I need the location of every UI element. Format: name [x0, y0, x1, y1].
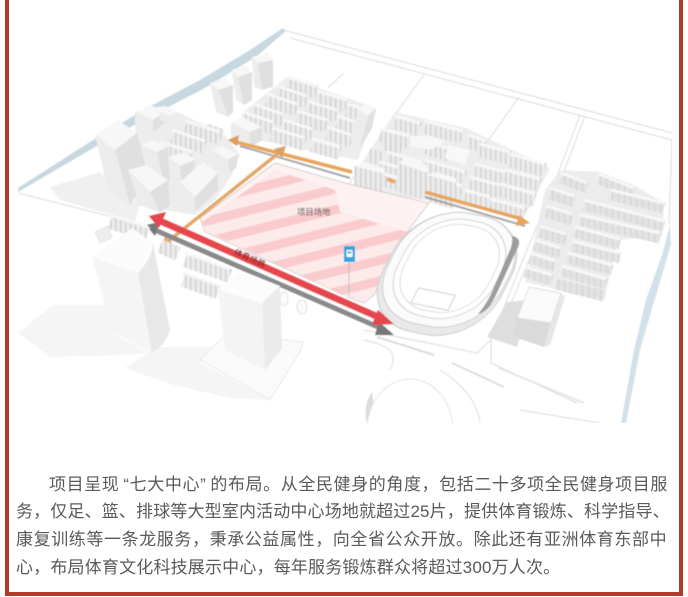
paragraph text: 务，仅足、篮、排球等大型室内活动中心场地就超过25片，提供体育锻炼、科学指导、	[16, 502, 670, 521]
rivers	[18, 28, 671, 423]
paragraph text: 康复训练等一条龙服务，秉承公益属性，向全省公众开放。除此还有亚洲体育东部中	[16, 530, 667, 549]
site hatching	[202, 170, 407, 301]
red road arrow	[149, 212, 394, 325]
site label: 项目场地	[297, 207, 331, 217]
paragraph text: 项目呈现“七大中心”的布局。从全民健身的角度，包括二十多项全民健身项目服	[49, 475, 668, 494]
building: upper left towers	[210, 53, 273, 117]
small low buildings near road	[95, 215, 307, 314]
grey road shadow arrow	[146, 222, 394, 335]
building: lower right block	[514, 287, 565, 347]
site illustration	[18, 28, 672, 423]
foreground curved tower	[92, 228, 170, 353]
site pale area	[200, 163, 429, 303]
project site	[200, 163, 429, 303]
residential block: upper left	[231, 77, 376, 160]
foreground plinth	[200, 333, 303, 400]
round building bottom	[368, 378, 454, 423]
bus stop sign	[344, 246, 355, 296]
building row: front of middle block	[354, 158, 456, 202]
stadium dark stand	[478, 236, 519, 314]
orange arrow: cross road	[161, 146, 286, 248]
stadium	[376, 211, 520, 336]
ground shadows	[18, 172, 530, 423]
orange arrow: top road	[228, 135, 530, 226]
towers and mid-rise: left cluster	[95, 105, 240, 215]
paragraph text: 心，布局体育文化科技展示中心，每年服务锻炼群众将超过300万人次。	[16, 558, 560, 577]
residential block: middle	[356, 112, 550, 216]
road label: 体育场路	[233, 247, 268, 270]
residential block: right	[525, 170, 664, 300]
foreground square tower	[218, 270, 282, 370]
paragraph text	[16, 475, 670, 577]
street lines	[18, 30, 672, 423]
